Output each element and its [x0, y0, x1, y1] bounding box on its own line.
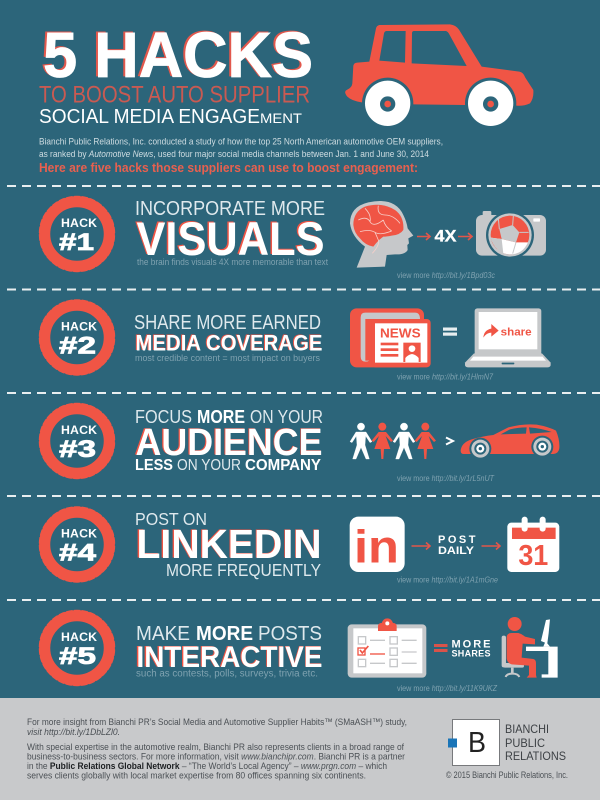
arrow: [482, 542, 500, 550]
panel: hack 1: [39, 196, 546, 280]
footer text: [27, 717, 407, 780]
logo: Bianchi Public Relations: [448, 720, 566, 766]
badge: hack 4 tire: #4: [59, 540, 97, 566]
arrow: [417, 233, 430, 240]
heading: focus more on audience: ON YOUR: [250, 407, 323, 427]
heading: focus more on audience: [134, 407, 323, 474]
heading: share more earned media coverage: MEDIA COVERAGE: [136, 330, 322, 356]
footer text: serves clients globally with local market expertise from 80 offices spanning six continents.: [27, 770, 366, 780]
label: more shares: [452, 638, 490, 658]
subtitle: MENT: [260, 110, 302, 126]
badge: hack 1 tire: #1: [59, 229, 94, 256]
copyright: © 2015 Bianchi Public Relations, Inc.: [446, 770, 568, 780]
heading: focus more on audience: FOCUS: [135, 407, 192, 427]
link: view more 4: view more http://bit.ly/1A1mGne: [397, 574, 498, 584]
icon: red car: [345, 24, 533, 129]
icon: newspaper: NEWS: [380, 325, 421, 340]
subtitle: [39, 82, 310, 128]
equals sign: [434, 644, 448, 652]
arrow: [412, 542, 430, 550]
heading: focus more on audience: AUDIENCE: [134, 422, 322, 464]
intro text: Bianchi Public Relations, Inc. conducted a study of how the top 25 North American automotive OEM suppliers,: [39, 136, 443, 148]
label: post daily: [438, 534, 476, 557]
heading: share more earned media coverage: most credible content = most impact on buyers: [135, 353, 320, 364]
icon: newspaper: [350, 308, 431, 367]
badge: hack 1 tire: [39, 196, 115, 272]
logo: Bianchi Public Relations: B: [468, 727, 486, 759]
label: post daily: POST: [438, 534, 476, 546]
title: 5 HACKS: [41, 18, 311, 90]
link: view more 3: view more http://bit.ly/1rL5nUT: [397, 473, 495, 483]
intro text: Here are five hacks those suppliers can use to boost engagement:: [39, 161, 418, 175]
heading: incorporate more visuals: VISUALS: [136, 212, 324, 265]
icon: calendar: [507, 517, 559, 572]
heading: post on linkedin: POST ON: [135, 509, 207, 529]
logo: Bianchi Public Relations: BIANCHI: [505, 722, 549, 736]
panel: hack 5: [39, 610, 558, 693]
icon: brain in head: [350, 201, 413, 268]
heading: make more posts interactive: [135, 623, 322, 680]
icon: calendar: 31: [518, 540, 548, 572]
heading: post on linkedin: LINKEDIN: [136, 521, 322, 567]
heading: post on linkedin: [135, 509, 322, 580]
heading: make more posts interactive: such as contests, polls, surveys, trivia etc.: [136, 668, 318, 680]
badge: hack 5 tire: #5: [59, 643, 96, 670]
label: 4X: 4X: [434, 226, 457, 246]
logo: Bianchi Public Relations: RELATIONS: [505, 749, 566, 763]
intro text: [39, 136, 443, 175]
badge: hack 2 tire: [39, 299, 115, 376]
icon: person at desk: [502, 617, 558, 678]
heading: post on linkedin: MORE FREQUENTLY: [166, 560, 321, 580]
heading: make more posts interactive: INTERACTIVE: [135, 640, 322, 674]
heading: share more earned media coverage: [134, 312, 322, 364]
badge: hack 5 tire: HACK: [61, 630, 97, 644]
heading: make more posts interactive: POSTS: [258, 623, 322, 645]
label: more shares: MORE: [452, 638, 490, 650]
panel: hack 3: [39, 403, 559, 483]
icon: laptop: [465, 308, 551, 367]
footer text: visit http://bit.ly/1DbLZl0.: [27, 727, 120, 737]
heading: make more posts interactive: MAKE: [136, 623, 190, 645]
heading: incorporate more visuals: INCORPORATE MORE: [135, 197, 325, 220]
label: more shares: SHARES: [452, 648, 490, 658]
badge: hack 2 tire: HACK: [61, 320, 97, 334]
heading: make more posts interactive: INTERACTIVE: [136, 641, 322, 674]
icon: camera: [476, 211, 546, 259]
footer text: in the Public Relations Global Network – “The World’s Local Agency” – www.prgn.com – which: [27, 761, 387, 771]
badge: hack 5 tire: [39, 610, 115, 686]
link: view more 1: view more http://bit.ly/1Bpd03c: [397, 270, 496, 280]
panel: footer: [0, 698, 600, 800]
arrow: [458, 233, 472, 240]
badge: hack 2 tire: #2: [59, 332, 96, 360]
subtitle: TO BOOST AUTO SUPPLIER: [39, 82, 310, 108]
label: post daily: DAILY: [438, 545, 475, 557]
link: view more 2: view more http://bit.ly/1HlmN7: [397, 372, 494, 382]
heading: make more posts interactive: MORE: [196, 623, 253, 645]
badge: hack 3 tire: HACK: [61, 423, 97, 437]
heading: incorporate more visuals: the brain finds visuals 4X more memorable than text: [137, 257, 328, 268]
logo: Bianchi Public Relations: PUBLIC: [505, 736, 545, 750]
badge: hack 4 tire: [39, 506, 115, 583]
footer text: business-to-business sectors. For more information, visit www.bianchipr.com. Bianchi PR is a partner: [27, 752, 405, 762]
heading: post on linkedin: LINKEDIN: [135, 520, 321, 566]
badge: hack 3 tire: [39, 403, 115, 479]
icon: people holding hands: [350, 423, 436, 459]
badge: hack 3 tire: #3: [59, 436, 96, 463]
footer text: With special expertise in the automotive realm, Bianchi PR also represents clients in a broad range of: [27, 742, 404, 752]
heading: focus more on audience: AUDIENCE: [136, 422, 322, 464]
icon: linkedin: in: [354, 521, 399, 573]
icon: sports car: [461, 424, 559, 460]
icon: linkedin: [350, 517, 405, 573]
heading: focus more on audience: LESS: [135, 457, 173, 474]
equals sign: [443, 328, 457, 336]
heading: focus more on audience: ON YOUR: [177, 457, 241, 474]
title: 5 HACKS: [43, 19, 313, 91]
subtitle: SOCIAL MEDIA ENGAGE: [39, 105, 260, 128]
heading: focus more on audience: MORE: [197, 407, 245, 427]
footer text: For more insight from Bianchi PR’s Social Media and Automotive Supplier Habits™ (SMaASH™) study,: [27, 717, 407, 727]
icon: laptop: share: [501, 327, 532, 339]
badge: hack 4 tire: HACK: [61, 526, 97, 540]
badge: hack 1 tire: HACK: [61, 216, 97, 230]
heading: share more earned media coverage: SHARE MORE EARNED: [134, 312, 321, 334]
greater-than sign: [446, 438, 453, 444]
panel: hack 2: [39, 299, 551, 382]
panel: hack 4: [39, 506, 559, 584]
link: view more 5: view more http://bit.ly/11K9UKZ: [397, 683, 498, 693]
heading: focus more on audience: COMPANY: [245, 457, 322, 474]
intro text: as ranked by Automotive News, used four major social media channels between Jan. 1 and June 30, 2014: [39, 149, 429, 160]
heading: share more earned media coverage: MEDIA COVERAGE: [134, 330, 322, 355]
heading: incorporate more visuals: VISUALS: [135, 211, 323, 264]
icon: clipboard checklist: [348, 618, 426, 678]
